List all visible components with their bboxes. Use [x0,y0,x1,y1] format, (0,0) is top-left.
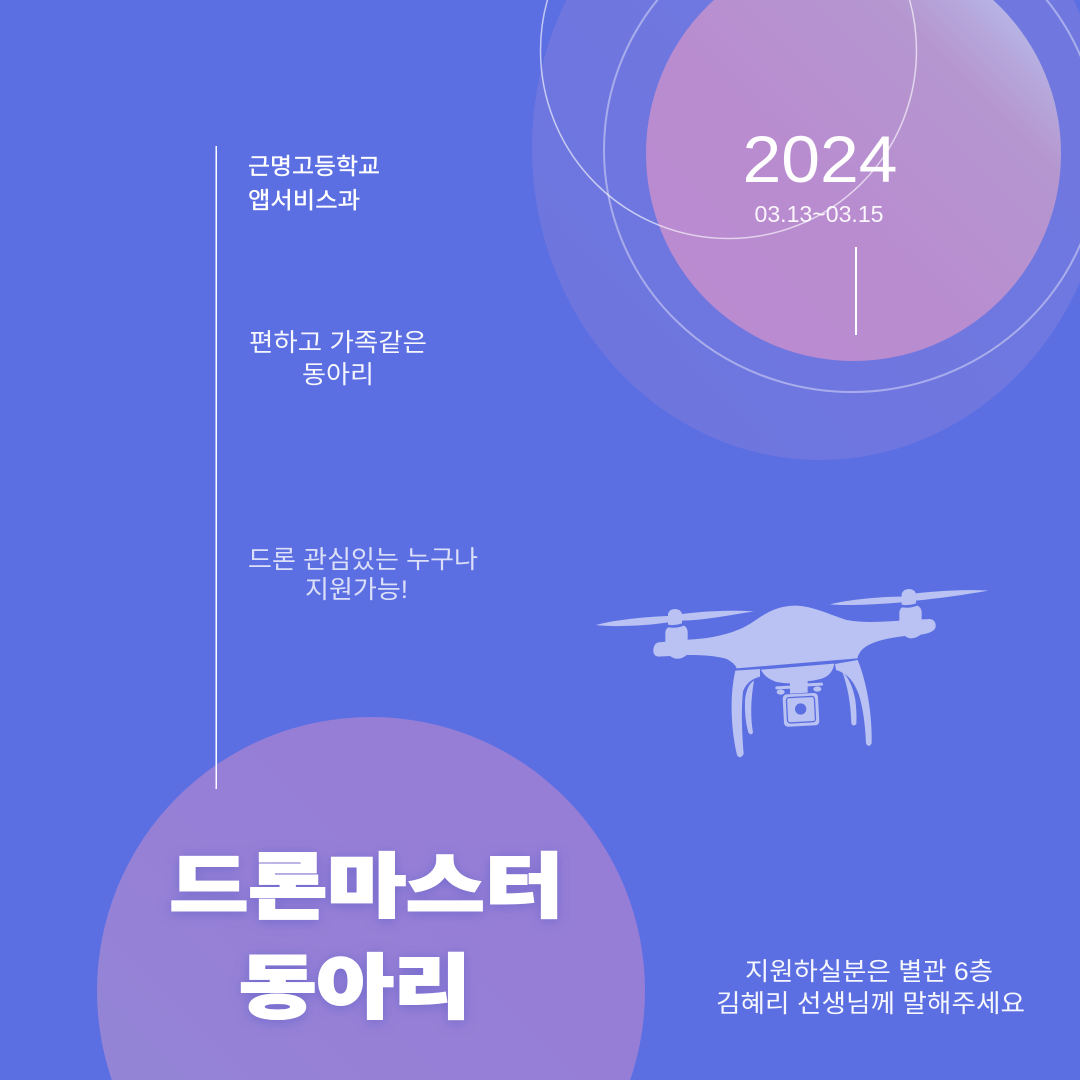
drone left leg outer [732,669,760,757]
outline ring: large [604,0,1080,392]
text block: club description: 동아리 [302,361,374,389]
date range: 03.13~03.15 [754,201,884,227]
text block: who can apply: 드론 관심있는 누구나 [248,546,478,574]
drone motor left upper [668,609,682,625]
title: 드론마스터 [170,848,564,926]
text block: who can apply [248,546,478,604]
drone gimbal [761,664,834,695]
short vertical line [855,247,857,335]
pink gradient circle [646,0,1061,361]
text block: how to apply: 지원하실분은 별관 6층 [745,958,993,986]
drone propeller right [830,590,988,605]
text block: how to apply: 김혜리 선생님께 말해주세요 [716,990,1025,1018]
title [170,848,564,1027]
drone propeller left [596,611,754,626]
drone left leg inner [745,681,754,734]
drone body [653,606,936,668]
text block: who can apply: 지원가능! [305,576,408,604]
text block: school and department [248,153,380,213]
decorative circle group: top right [532,0,1080,460]
drone right leg inner [842,672,857,726]
drone motor right upper [902,589,916,605]
year: 2024 [742,122,898,196]
drone camera [783,693,819,727]
text block: club description [249,329,427,389]
outline ring: offset [540,0,916,238]
icon: drone [596,589,988,757]
drone right leg outer [835,660,872,746]
title: 동아리 [239,949,471,1027]
drone motor left lower [665,626,688,645]
text block: club description: 편하고 가족같은 [249,329,427,357]
purple circle behind title [97,717,645,1080]
year and dates [742,122,898,227]
drone motor right lower [899,606,922,627]
text block: school and department: 근명고등학교 [248,153,380,179]
text block: school and department: 앱서비스과 [248,187,360,213]
left vertical line [216,146,217,789]
outer translucent circle [532,0,1080,460]
text block: how to apply [716,958,1025,1018]
